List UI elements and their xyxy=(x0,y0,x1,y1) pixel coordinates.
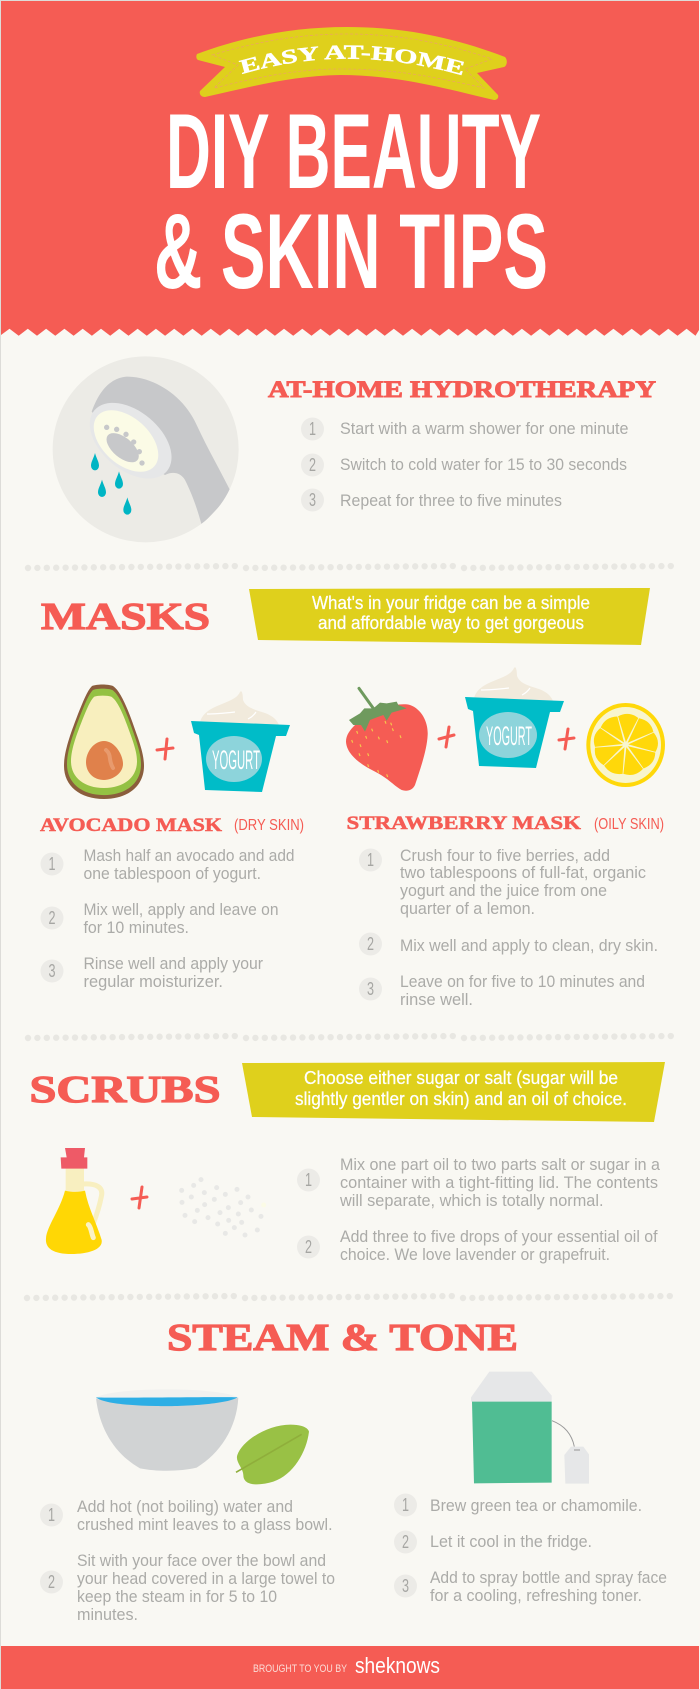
strawberry step 2 xyxy=(359,932,658,956)
strawberry step 2: 2 xyxy=(367,934,374,954)
heading: strawberry mask: (OILY SKIN) xyxy=(594,816,664,833)
plus sign xyxy=(559,729,574,749)
strawberry step 3: rinse well. xyxy=(400,990,473,1009)
callout: sugar or salt xyxy=(242,1062,665,1122)
heading: avocado mask xyxy=(40,815,304,836)
logo: sheknows: sheknows xyxy=(355,1653,440,1678)
heading: strawberry mask: STRAWBERRY MASK xyxy=(346,813,581,834)
icon: shower head xyxy=(53,356,239,542)
icon: mint leaf xyxy=(236,1425,309,1484)
tone step 3: Add to spray bottle and spray face xyxy=(430,1568,667,1587)
avocado step 2: for 10 minutes. xyxy=(84,918,189,937)
strawberry step 3: Leave on for five to 10 minutes and xyxy=(400,972,645,991)
callout: sugar or salt: Choose either sugar or salt (sugar will be xyxy=(304,1068,618,1088)
title xyxy=(154,91,548,311)
ribbon banner xyxy=(196,27,507,100)
step 1: Start with a warm shower for one minute xyxy=(340,419,628,438)
icon: bowl xyxy=(96,1389,238,1471)
strawberry step 1: quarter of a lemon. xyxy=(400,899,535,918)
avocado step 1: Mash half an avocado and add xyxy=(84,846,294,865)
scrubs step 2: 2 xyxy=(305,1237,312,1257)
heading: avocado mask: (DRY SKIN) xyxy=(234,817,304,834)
icon: strawberry xyxy=(346,688,428,791)
step 1 xyxy=(301,418,628,440)
tone step 1: Brew green tea or chamomile. xyxy=(430,1496,642,1515)
avocado step 1: 1 xyxy=(48,854,56,874)
callout: fridge: and affordable way to get gorgeous xyxy=(318,613,584,633)
strawberry step 1 xyxy=(359,846,646,918)
icon: salt or sugar grains xyxy=(179,1177,266,1237)
scrubs step 1 xyxy=(297,1155,661,1210)
tone step 2: 2 xyxy=(402,1532,409,1552)
steam step 2: your head covered in a large towel to xyxy=(77,1569,335,1588)
icon: yogurt cup xyxy=(191,691,290,792)
step 1: 1 xyxy=(309,419,316,439)
strawberry step 1: Crush four to five berries, add xyxy=(400,846,610,865)
step 3: Repeat for three to five minutes xyxy=(340,491,562,510)
scrubs step 1: 1 xyxy=(305,1170,312,1190)
avocado step 2: 2 xyxy=(48,908,56,928)
callout: sugar or salt: slightly gentler on skin) and an oil of choice. xyxy=(295,1089,627,1109)
avocado step 1: one tablespoon of yogurt. xyxy=(84,864,261,883)
callout: fridge: What's in your fridge can be a simple xyxy=(312,593,590,613)
avocado step 2: Mix well, apply and leave on xyxy=(84,900,278,919)
panel: masks xyxy=(40,588,665,1009)
step 2: Switch to cold water for 15 to 30 seconds xyxy=(340,455,627,474)
strawberry step 1: 1 xyxy=(367,850,374,870)
footer credit: BROUGHT TO YOU BY xyxy=(253,1663,348,1675)
steam step 1 xyxy=(40,1497,332,1534)
tone step 3 xyxy=(394,1568,667,1605)
strawberry step 3: 3 xyxy=(367,979,374,999)
callout: fridge xyxy=(249,588,650,645)
strawberry step 2: Mix well and apply to clean, dry skin. xyxy=(400,936,658,955)
avocado step 3: regular moisturizer. xyxy=(84,972,223,991)
tone step 3: 3 xyxy=(402,1576,409,1596)
steam step 2: Sit with your face over the bowl and xyxy=(77,1551,326,1570)
strawberry step 3 xyxy=(359,972,645,1009)
heading: avocado mask: AVOCADO MASK xyxy=(40,815,222,836)
avocado step 3: Rinse well and apply your xyxy=(84,954,263,973)
plus sign xyxy=(132,1187,147,1208)
header panel xyxy=(1,1,699,336)
heading: at-home hydrotherapy: AT-HOME HYDROTHERAPY xyxy=(268,377,656,402)
step 3: 3 xyxy=(309,490,316,510)
steam step 1: 1 xyxy=(48,1505,55,1525)
icon: lemon slice xyxy=(586,703,665,787)
panel: scrubs xyxy=(30,1062,665,1264)
steam step 2: 2 xyxy=(48,1572,55,1592)
scrubs step 1: container with a tight-fitting lid. The contents xyxy=(340,1173,658,1192)
heading: steam and tone: STEAM & TONE xyxy=(167,1317,518,1359)
scrubs step 1: Mix one part oil to two parts salt or sugar in a xyxy=(340,1155,661,1174)
steam step 2: minutes. xyxy=(77,1605,138,1624)
icon: yogurt cup: YOGURT xyxy=(486,721,532,751)
step 3 xyxy=(301,488,562,512)
scrubs step 1: will separate, which is totally normal. xyxy=(339,1191,604,1210)
tone step 3: for a cooling, refreshing toner. xyxy=(430,1586,642,1605)
steam step 2: keep the steam in for 5 to 10 xyxy=(77,1587,277,1606)
icon: avocado xyxy=(64,684,144,799)
icon: yogurt cup xyxy=(465,667,564,768)
red zigzag header background xyxy=(1,1,699,336)
panel: steam and tone xyxy=(40,1317,667,1624)
plus sign xyxy=(439,727,454,747)
heading: masks: MASKS xyxy=(41,596,210,638)
avocado step 1 xyxy=(40,846,294,883)
heading: scrubs: SCRUBS xyxy=(30,1069,220,1111)
scrubs step 2 xyxy=(297,1227,658,1264)
tone step 2: Let it cool in the fridge. xyxy=(430,1532,592,1551)
plus sign xyxy=(157,739,173,759)
icon: oil bottle xyxy=(46,1148,102,1254)
icon: tea bag xyxy=(471,1372,589,1484)
scrubs step 2: Add three to five drops of your essential oil of xyxy=(340,1227,658,1246)
avocado step 3: 3 xyxy=(48,961,56,981)
heading: strawberry mask xyxy=(346,813,664,834)
steam step 1: crushed mint leaves to a glass bowl. xyxy=(77,1515,332,1534)
step 2 xyxy=(301,454,627,476)
banner text: EASY AT-HOME xyxy=(238,45,464,76)
tone step 2 xyxy=(394,1530,592,1554)
scrubs step 2: choice. We love lavender or grapefruit. xyxy=(340,1245,610,1264)
strawberry step 1: two tablespoons of full-fat, organic xyxy=(400,863,646,882)
tone step 1 xyxy=(394,1494,642,1516)
icon: yogurt cup: YOGURT xyxy=(212,745,260,775)
tone step 1: 1 xyxy=(402,1495,409,1515)
steam step 1: Add hot (not boiling) water and xyxy=(77,1497,293,1516)
avocado step 2 xyxy=(40,900,278,937)
step 2: 2 xyxy=(309,455,316,475)
steam step 2 xyxy=(40,1551,335,1624)
avocado step 3 xyxy=(40,954,263,991)
strawberry step 1: yogurt and the juice from one xyxy=(400,881,607,900)
footer xyxy=(1,1646,699,1689)
panel: hydrotherapy xyxy=(53,356,656,542)
